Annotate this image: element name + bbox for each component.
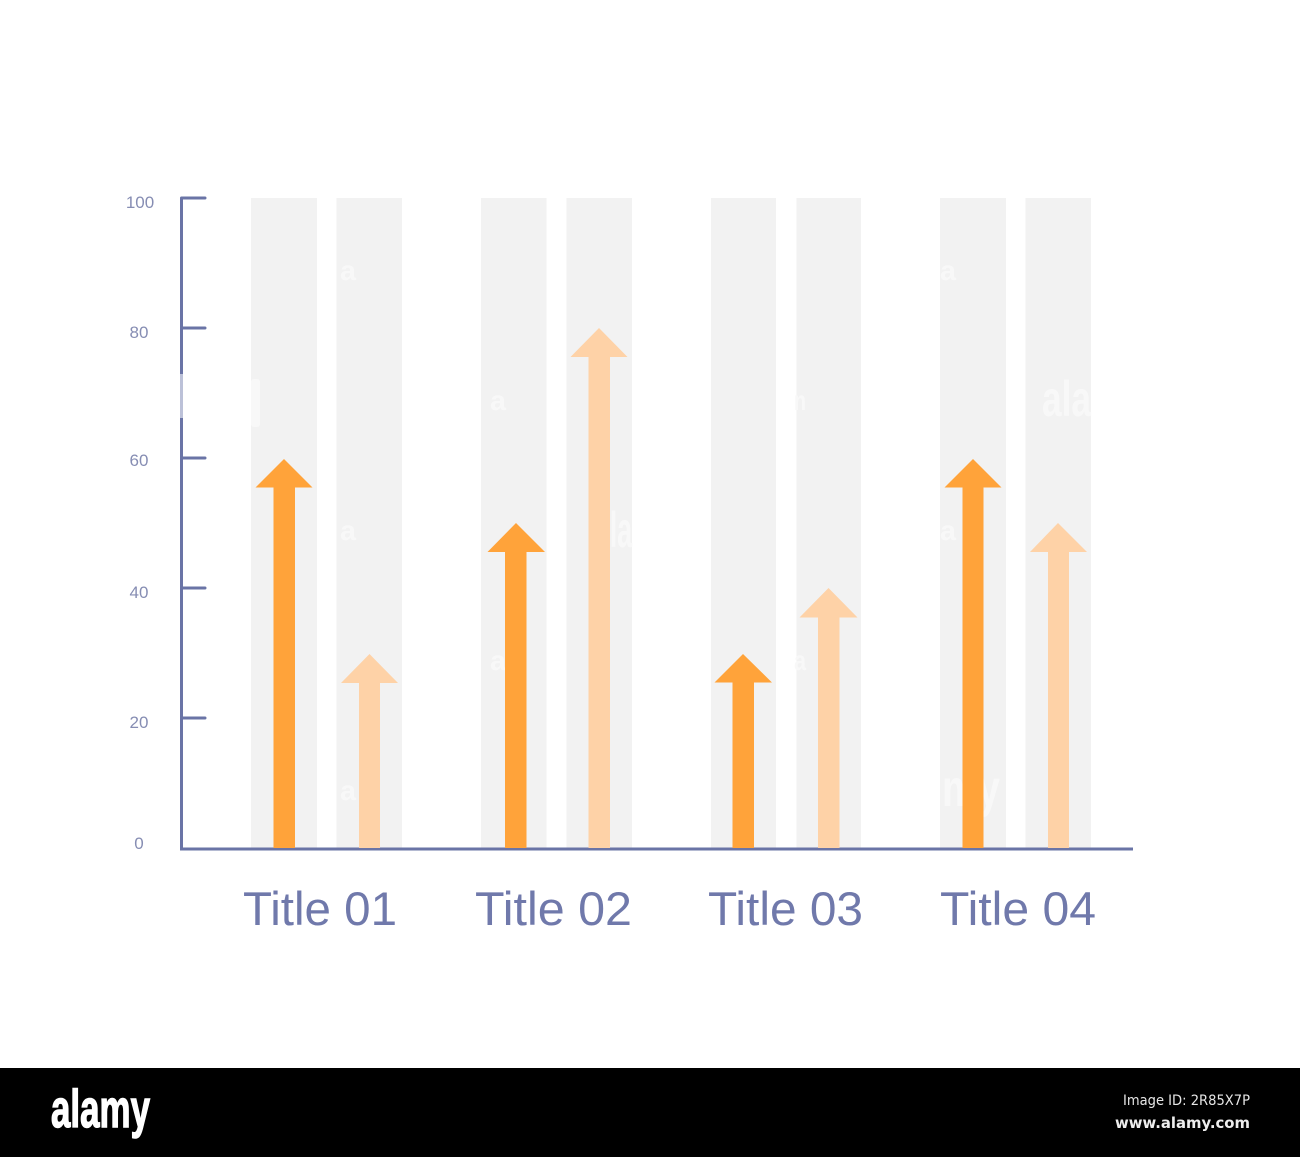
y axis labels: 0: [134, 834, 144, 853]
category labels: [243, 882, 1096, 935]
watermark traces: ala: [1042, 371, 1092, 427]
watermark traces: a: [340, 775, 356, 806]
image id: Image ID: 2R85X7P: [1123, 1093, 1250, 1109]
y axis labels: 60: [130, 451, 148, 470]
website: www.alamy.com: [1115, 1114, 1250, 1132]
y axis labels: 80: [130, 323, 148, 342]
arrow: Title 04 series B: [1030, 523, 1087, 848]
arrow: Title 01 series B: [341, 654, 398, 848]
faded axis segment: [180, 374, 183, 418]
watermark fragment at left of first column: [251, 379, 260, 427]
watermark traces: a: [794, 645, 806, 676]
y axis labels: [126, 193, 154, 853]
arrow: Title 02 series A: [488, 523, 545, 848]
watermark traces: ala: [595, 502, 633, 558]
watermark traces: a: [340, 515, 356, 546]
watermark traces: a: [940, 255, 956, 286]
arrow: Title 01 series A: [256, 459, 312, 848]
watermark traces: a: [340, 255, 356, 286]
arrow: Title 03 series B: [800, 588, 858, 848]
category labels: Title 03: [708, 882, 863, 935]
arrow: Title 03 series A: [714, 654, 772, 848]
category labels: Title 04: [940, 882, 1096, 935]
watermark traces: a: [490, 385, 506, 416]
watermark traces: n: [794, 385, 806, 416]
y axis labels: 40: [130, 583, 148, 602]
watermark traces: a: [490, 645, 506, 676]
watermark traces: my: [942, 760, 1000, 818]
category labels: Title 02: [475, 882, 632, 935]
footer band: [0, 1068, 1300, 1157]
y axis labels: 20: [130, 713, 148, 732]
y axis labels: 100: [126, 193, 154, 212]
y axis: [182, 198, 205, 849]
background columns: [251, 198, 1091, 848]
footer logo: alamy: [51, 1080, 150, 1139]
arrow: Title 04 series A: [944, 459, 1002, 848]
watermark traces: a: [940, 515, 956, 546]
x axis: [180, 848, 1133, 850]
watermark traces: [340, 255, 1092, 818]
category labels: Title 01: [243, 882, 397, 935]
arrow: Title 02 series B: [570, 328, 628, 848]
